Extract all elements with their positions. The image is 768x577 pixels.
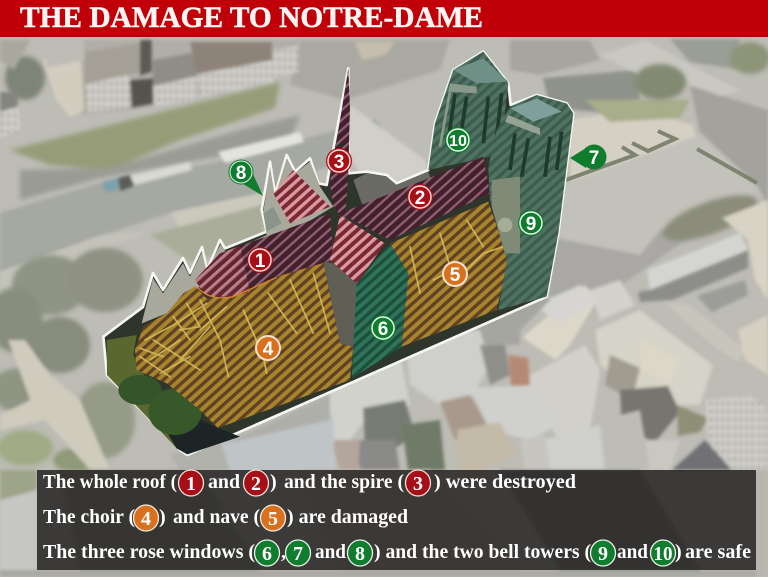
legend line 3: safe: ) and the two bell towers ( <box>374 541 591 563</box>
transept roof north <box>273 170 330 223</box>
map marker 10 <box>445 127 471 153</box>
roof 2, nave <box>340 157 490 240</box>
plaza hedges <box>563 131 757 183</box>
tower 10 <box>428 52 508 170</box>
top-left buildings <box>0 40 300 138</box>
legend line 1: destroyed <box>43 470 576 496</box>
park paths <box>0 340 110 470</box>
map marker 6 <box>370 315 396 341</box>
legend line 1: destroyed: 1 <box>186 473 196 495</box>
map marker 1 <box>247 247 273 273</box>
legend line 1: destroyed: The whole roof ( <box>43 471 177 493</box>
map marker 9 <box>518 210 544 236</box>
legend line 1: destroyed: and the spire ( <box>284 471 404 493</box>
map marker 8 with pointer: 8 <box>236 163 246 184</box>
map marker 9: 9 <box>526 214 536 235</box>
map marker 7 with pointer <box>570 144 606 170</box>
white outline <box>103 52 573 455</box>
map marker 4 <box>255 335 281 361</box>
riverbank, gardens and roads <box>0 40 768 300</box>
map marker 3 <box>326 148 352 174</box>
map marker 3: 3 <box>334 152 344 173</box>
orange roof edge <box>197 277 277 298</box>
transept stone wall <box>323 262 358 347</box>
rose window 6, transept wall <box>352 243 408 378</box>
map marker 8 with pointer <box>228 160 263 196</box>
map marker 10: 10 <box>449 133 467 150</box>
legend line 2: damaged: and nave ( <box>173 506 260 528</box>
right-hand buildings <box>523 200 768 470</box>
legend line 3: safe: are safe <box>685 541 751 563</box>
legend line 2: damaged: 4 <box>141 508 151 530</box>
map marker 4: 4 <box>263 339 274 360</box>
legend line 1: destroyed: 3 <box>413 473 423 495</box>
roof 1, choir <box>195 213 333 297</box>
legend line 1: destroyed: and <box>208 471 240 493</box>
legend line 3: safe: 9 <box>598 543 608 565</box>
legend line 2: damaged: The choir ( <box>43 506 135 528</box>
buildings behind legend and bottom strip <box>0 470 768 577</box>
lawn and trees at the east end <box>107 335 240 454</box>
legend panel <box>37 470 756 570</box>
nave vault ribs <box>410 220 503 293</box>
legend line 3: safe: ) <box>675 541 682 563</box>
legend line 3: safe: The three rose windows ( <box>43 541 255 563</box>
nave, damaged <box>390 202 508 347</box>
legend line 1: destroyed: ) <box>270 471 277 493</box>
tower 9 <box>488 95 573 310</box>
river and water <box>0 39 740 272</box>
legend line 1: destroyed: 2 <box>251 473 261 495</box>
choir vault ribs <box>140 273 330 377</box>
legend line 3: safe: 8 <box>355 543 365 565</box>
legend line 1: destroyed: ) were destroyed <box>434 471 576 493</box>
map marker 1: 1 <box>255 251 266 272</box>
choir, damaged <box>135 262 353 428</box>
boats on river <box>103 132 304 192</box>
legend line 3: safe <box>43 540 751 566</box>
map marker 2 <box>407 184 433 210</box>
legend line 3: safe: and <box>617 541 648 563</box>
map marker 6: 6 <box>378 319 388 340</box>
legend line 3: safe: 7 <box>293 543 303 565</box>
map marker 7 with pointer: 7 <box>589 148 599 169</box>
title: THE DAMAGE TO NOTRE-DAME <box>20 1 483 34</box>
legend line 3: safe: 10 <box>654 543 672 565</box>
east end chapels and buttress tips <box>142 158 433 323</box>
legend line 2: damaged <box>43 505 408 531</box>
transept roof south <box>330 215 385 283</box>
legend line 3: safe: and <box>315 541 346 563</box>
trees <box>0 42 768 472</box>
legend line 3: safe: 6 <box>262 543 272 565</box>
bottom-centre buildings <box>170 297 650 470</box>
spire <box>330 68 350 220</box>
map marker 5: 5 <box>450 265 461 286</box>
legend line 2: damaged: ) are damaged <box>287 506 408 528</box>
legend line 2: damaged: 5 <box>268 508 278 530</box>
legend line 3: safe: , <box>281 541 286 563</box>
title banner <box>0 0 768 37</box>
cathedral cut-out <box>103 52 573 455</box>
lighter east end of roof 1 <box>195 246 250 297</box>
map marker 2: 2 <box>415 188 425 209</box>
map marker 5 <box>442 261 468 287</box>
legend line 2: damaged: ) <box>159 506 166 528</box>
